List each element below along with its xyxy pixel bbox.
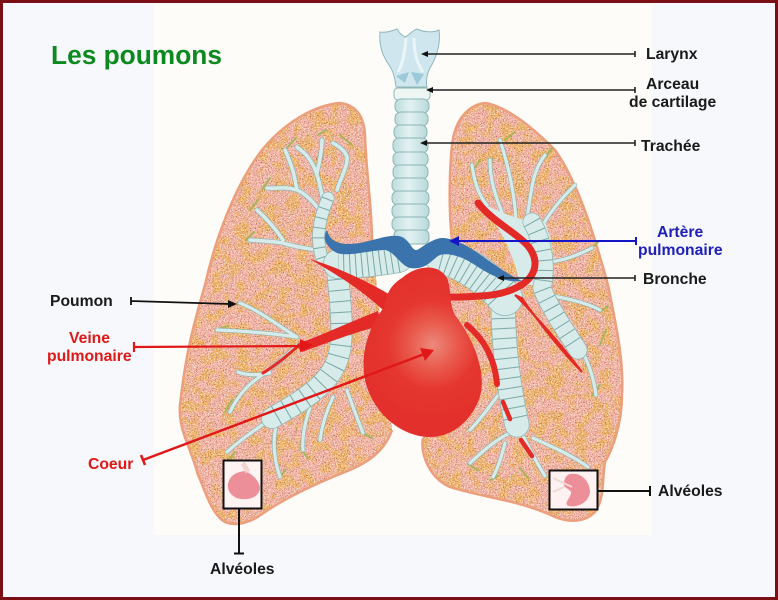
- left lung: [180, 103, 392, 524]
- label: Larynx: Larynx: [646, 46, 698, 63]
- heart: [363, 267, 482, 437]
- label: Bronche: Bronche: [643, 271, 707, 288]
- label: Alvéoles right: Alvéoles: [658, 483, 723, 500]
- label: Trachée: [420, 138, 701, 155]
- label: Veine pulmonaire: pulmonaire: [47, 348, 132, 365]
- label: Larynx: [421, 46, 698, 63]
- label: Artère pulmonaire: pulmonaire: [638, 242, 723, 259]
- right lung descending vessel: [515, 295, 582, 372]
- label: Artère pulmonaire: [449, 224, 723, 259]
- right bronchial tree: [442, 132, 608, 480]
- lung rims: [180, 103, 622, 524]
- label: Arceau de cartilage: Arceau: [646, 76, 699, 93]
- label: Veine pulmonaire: [47, 330, 313, 365]
- inset: right alveoli box: [550, 470, 598, 510]
- inset: left alveoli box: [224, 460, 262, 508]
- illustration: lungs anatomy: [175, 29, 627, 530]
- label: Poumon: [50, 293, 237, 310]
- label: Arceau de cartilage: [426, 76, 716, 111]
- lung tissue texture: [175, 100, 627, 530]
- upper right pale fan: [482, 203, 554, 285]
- small vessel segments: [503, 402, 532, 456]
- label: Coeur: [88, 348, 434, 473]
- larynx: [380, 29, 439, 87]
- label: Trachée: Trachée: [641, 138, 701, 155]
- lower right artery branch: [467, 325, 497, 384]
- label: Alvéoles right: [598, 483, 723, 500]
- right lung: [422, 103, 622, 521]
- label: Poumon: Poumon: [50, 293, 113, 310]
- label: Arceau de cartilage: de cartilage: [629, 94, 716, 111]
- pulmonary vein thin branch: [263, 346, 298, 373]
- pulmonary artery: [325, 230, 522, 281]
- label: Bronche: [497, 271, 707, 288]
- label: Alvéoles bottom: Alvéoles: [210, 561, 275, 578]
- label: Coeur: Coeur: [88, 456, 133, 473]
- label: Veine pulmonaire: Veine: [69, 330, 110, 347]
- illustration paper: [154, 5, 652, 535]
- left pulmonary vessel: [310, 259, 395, 312]
- trachea: [392, 88, 430, 244]
- left bronchial tree: [215, 130, 398, 478]
- label: Alvéoles bottom: [210, 509, 275, 578]
- pulmonary vein: [297, 311, 382, 352]
- label: Artère pulmonaire: Artère: [657, 224, 703, 241]
- title: Les poumons: [51, 40, 222, 70]
- right pulmonary vessel arc: [440, 203, 535, 297]
